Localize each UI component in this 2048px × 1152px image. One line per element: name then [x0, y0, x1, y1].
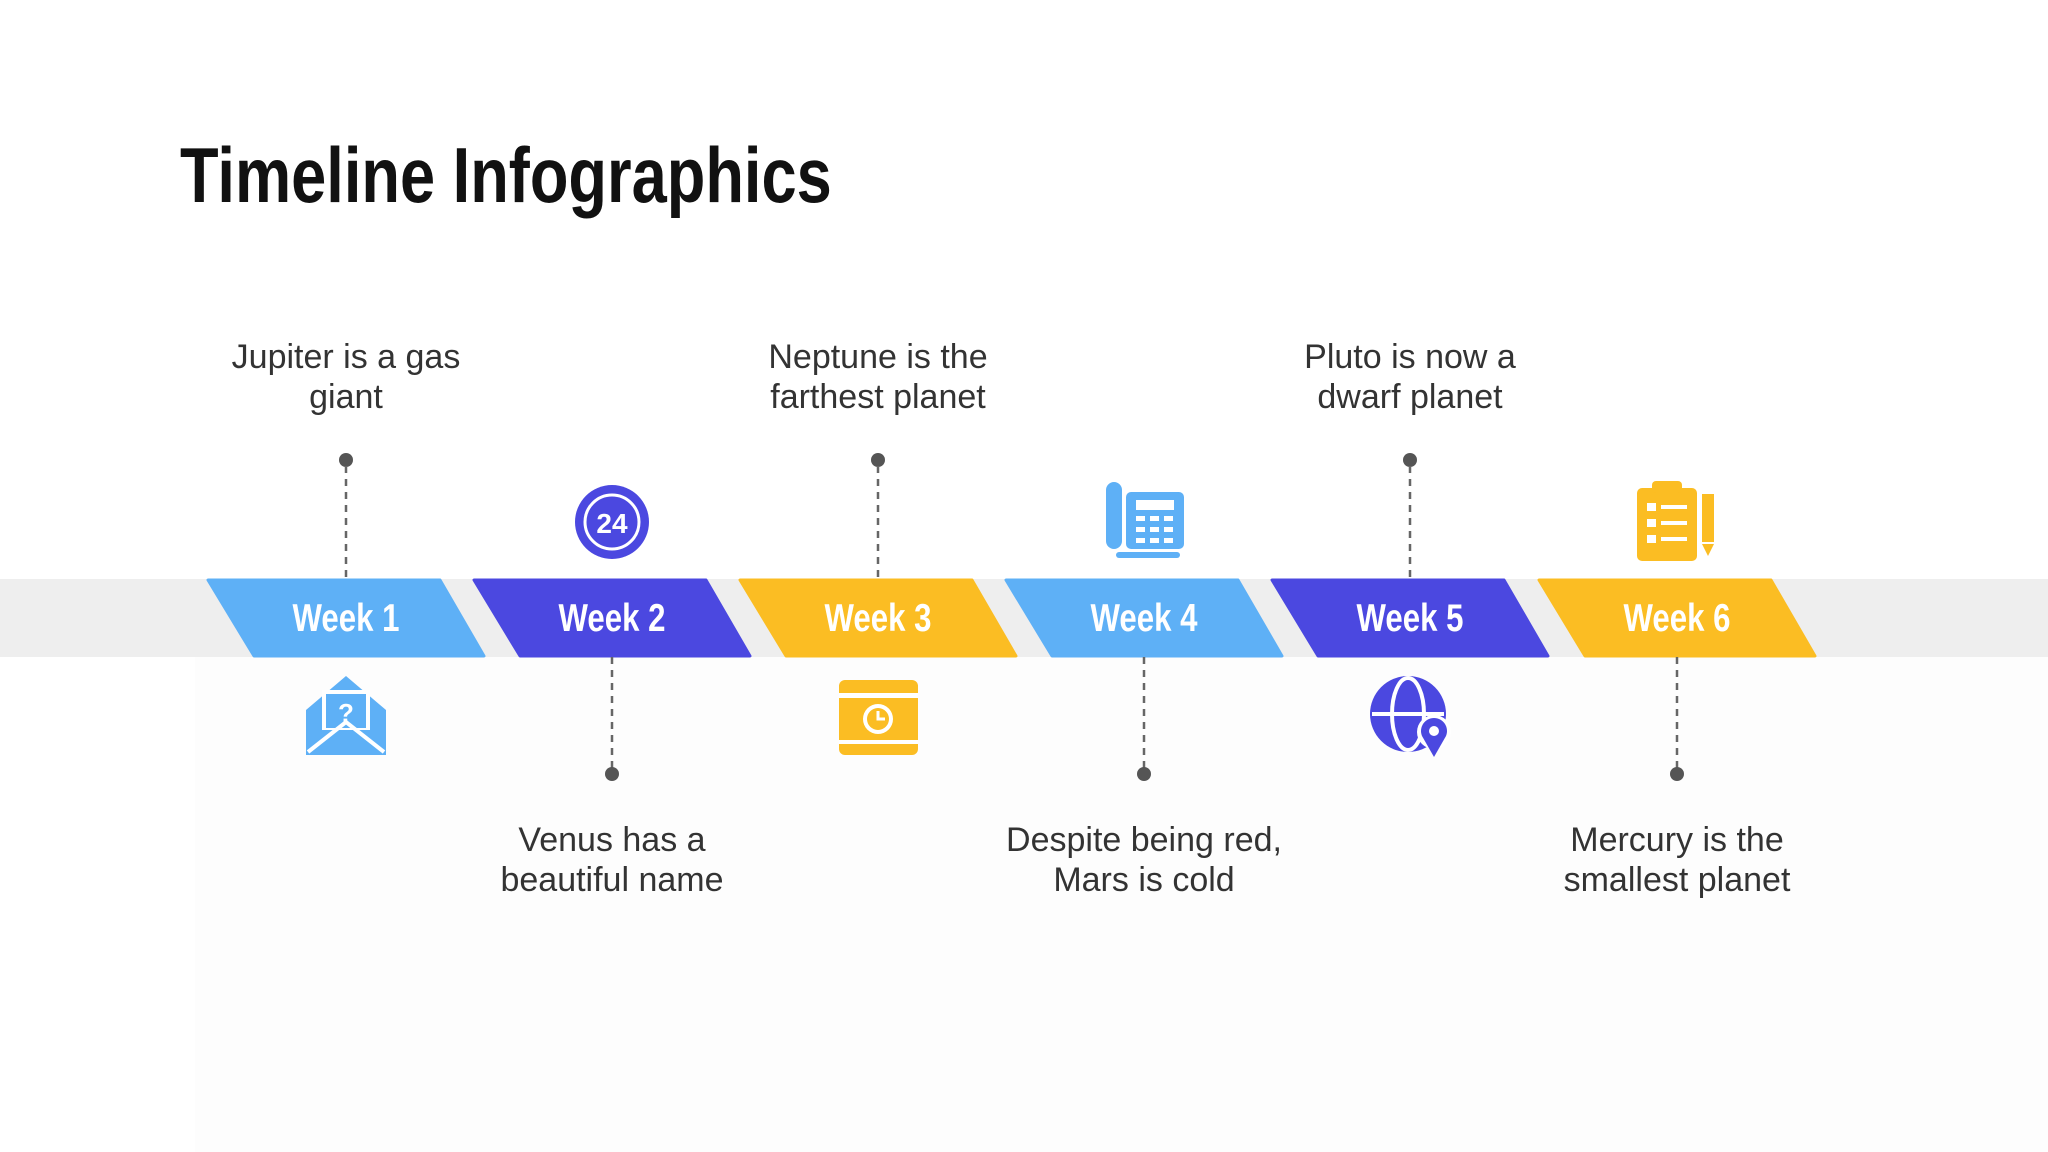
title: Timeline Infographics	[180, 133, 832, 220]
week 2: Week 2	[559, 597, 665, 640]
text: week 4: Despite being red,	[1006, 821, 1282, 859]
icon: 24 hours: 24	[596, 508, 628, 539]
week 5: Week 5	[1357, 597, 1463, 640]
icon: fax phone	[1106, 482, 1184, 558]
icon: envelope question: ?	[338, 698, 354, 728]
text: week 1: Jupiter is a gas	[232, 338, 460, 376]
icon: 24 hours	[575, 485, 649, 559]
text: week 2: Venus has a	[518, 821, 706, 859]
icon: envelope question	[306, 676, 386, 755]
icon: calendar clock	[839, 680, 918, 755]
week 5	[1272, 580, 1548, 656]
text: week 4: Mars is cold	[1053, 861, 1235, 899]
connector week 5	[1403, 453, 1417, 579]
week 6: Week 6	[1624, 597, 1730, 640]
connector week 2	[605, 657, 619, 781]
week 3	[740, 580, 1016, 656]
text: week 6: Mercury is the	[1570, 821, 1784, 859]
week 4	[1006, 580, 1282, 656]
week 3: Week 3	[825, 597, 931, 640]
week 4: Week 4	[1091, 597, 1198, 640]
week 1: Week 1	[293, 597, 399, 640]
text: week 6: smallest planet	[1564, 861, 1791, 899]
text: week 5: Pluto is now a	[1304, 338, 1516, 376]
text: week 5: dwarf planet	[1317, 378, 1503, 416]
connector week 4	[1137, 657, 1151, 781]
connector week 1	[339, 453, 353, 579]
timeline band	[0, 579, 2048, 657]
connector week 6	[1670, 657, 1684, 781]
icon: clipboard checklist	[1637, 481, 1714, 561]
text: week 2: beautiful name	[500, 861, 724, 899]
text: week 3: farthest planet	[770, 378, 986, 416]
week 1	[208, 580, 484, 656]
week 2	[474, 580, 750, 656]
text: week 3: Neptune is the	[768, 338, 988, 376]
icon: globe with pin	[1370, 676, 1451, 757]
text: week 1: giant	[309, 378, 383, 416]
connector week 3	[871, 453, 885, 579]
week 6	[1539, 580, 1815, 656]
